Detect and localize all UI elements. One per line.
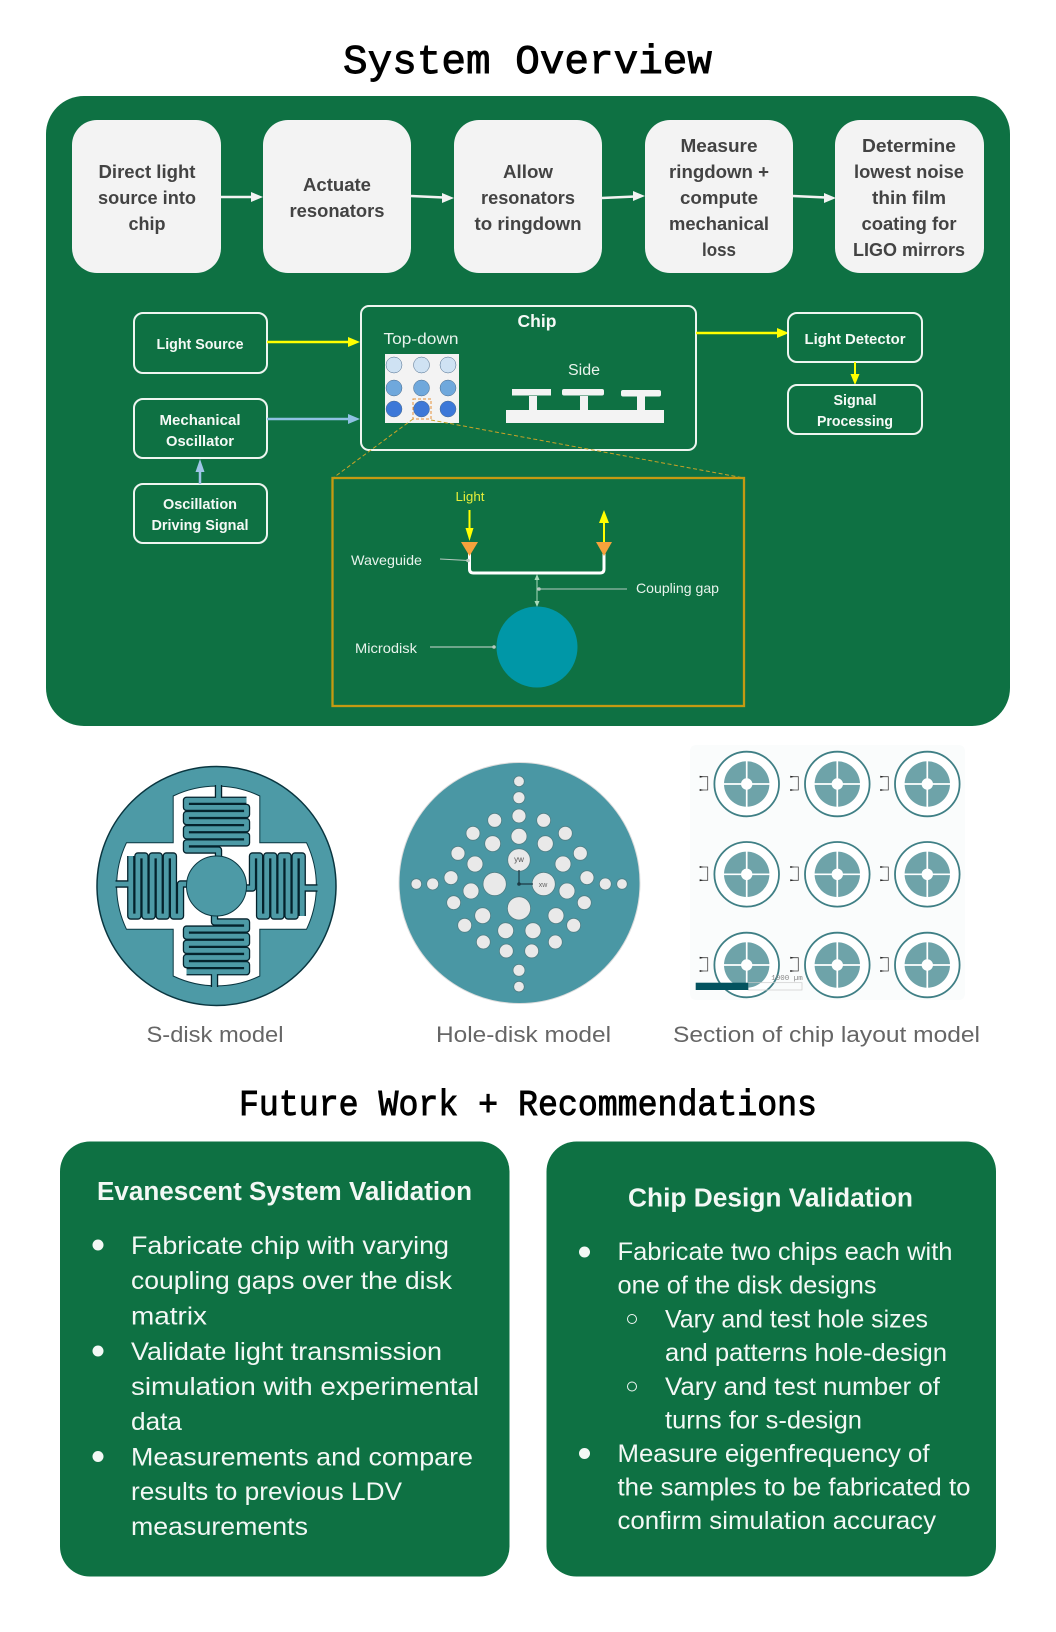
arrow: step 2 to 3 — [411, 193, 454, 203]
step: measure: mechanical — [669, 213, 769, 234]
label: waveguide: Waveguide — [351, 552, 422, 568]
title: System Overview: System Overview — [343, 40, 712, 86]
arrow: step 3 to 4 — [602, 191, 645, 201]
microdisk — [496, 606, 578, 688]
model: chip layout section — [690, 745, 965, 1000]
step: determine — [835, 120, 984, 273]
model: s-disk — [97, 766, 336, 1006]
bullet list: results to previous LDV — [131, 1478, 402, 1506]
bullet list: confirm simulation accuracy — [618, 1507, 936, 1535]
box: chip — [361, 306, 696, 450]
step: actuate: resonators — [290, 200, 384, 221]
bullet list: turns for s-design — [665, 1406, 862, 1434]
step: measure: loss — [702, 239, 736, 260]
step: ringdown: Allow — [503, 161, 553, 182]
bullet list: the samples to be fabricated to — [618, 1474, 970, 1502]
arrow: step 4 to 5 — [793, 193, 836, 203]
panel heading: Evanescent System Validation — [97, 1178, 472, 1206]
step: direct light: Direct light — [98, 161, 196, 182]
arrow: oscillator to chip — [267, 414, 360, 424]
step: actuate — [263, 120, 411, 273]
bullet list: Validate light transmission — [131, 1338, 442, 1366]
box: chip: Chip — [518, 311, 556, 331]
step: ringdown — [454, 120, 602, 273]
model: hole-disk — [399, 762, 640, 1004]
arrow: light out — [599, 510, 609, 542]
arrow: step 1 to 2 — [221, 192, 263, 202]
label: coupling gap — [537, 580, 719, 596]
box: signal processing — [788, 385, 922, 434]
bullet list: one of the disk designs — [618, 1272, 876, 1300]
chip top-down view — [384, 331, 459, 423]
caption: hole-disk: Hole-disk model — [436, 1022, 611, 1047]
arrow: driving signal to oscillator — [196, 459, 204, 484]
step: measure: ringdown + — [669, 161, 769, 182]
box: oscillation driving signal — [134, 484, 267, 543]
bullet list: data — [131, 1408, 183, 1436]
model: hole-disk: yw — [514, 855, 524, 864]
box: light source — [134, 313, 267, 373]
waveguide — [470, 553, 604, 573]
box: light detector — [788, 313, 922, 362]
block diagram — [134, 306, 922, 543]
heading: future work: Future Work + Recommendations — [239, 1085, 817, 1126]
step: determine: thin film — [872, 187, 946, 208]
arrow: chip to detector — [696, 328, 789, 338]
step: direct light: chip — [128, 213, 166, 234]
box: mechanical oscillator — [134, 399, 267, 458]
bullet list: Measurements and compare — [131, 1444, 473, 1472]
step: determine: Determine — [862, 135, 956, 156]
box: oscillation driving signal: Driving Signal — [152, 517, 248, 534]
chip side view: Side — [568, 362, 600, 379]
arrow: coupling gap — [534, 574, 540, 607]
step: actuate: Actuate — [303, 174, 371, 195]
grating couplers — [461, 542, 612, 556]
step: ringdown: to ringdown — [474, 213, 582, 234]
step: measure: compute — [680, 187, 758, 208]
panel: chip design validation — [546, 1142, 996, 1576]
label: light: Light — [456, 489, 485, 504]
panel: evanescent system validation — [60, 1142, 510, 1576]
bullet list: Vary and test hole sizes — [665, 1306, 928, 1334]
label: microdisk — [355, 640, 496, 656]
caption: s-disk: S-disk model — [146, 1022, 284, 1047]
panel: system overview — [46, 96, 1010, 726]
bullet list: coupling gaps over the disk — [131, 1267, 452, 1295]
step: direct light: source into — [98, 187, 196, 208]
scale bar: 1000 µm — [771, 975, 803, 983]
scale bar — [696, 975, 803, 990]
panel heading: Chip Design Validation — [628, 1184, 913, 1212]
label: waveguide — [351, 552, 470, 568]
arrow: detector to signal processing — [850, 362, 860, 385]
bullet list: measurements — [131, 1513, 308, 1541]
arrow: light in — [466, 510, 474, 541]
bullet list: matrix — [131, 1302, 207, 1330]
label: coupling gap: Coupling gap — [636, 580, 719, 596]
label: microdisk: Microdisk — [355, 640, 418, 656]
inset: waveguide and microdisk detail — [332, 478, 744, 706]
bullet list: Measure eigenfrequency of — [618, 1440, 930, 1468]
step: direct light — [72, 120, 221, 273]
zoom callout lines — [333, 419, 744, 478]
bullet list — [92, 1232, 479, 1541]
step: measure: Measure — [680, 135, 758, 156]
box: mechanical oscillator: Mechanical — [160, 412, 240, 429]
bullet list — [579, 1238, 970, 1535]
bullet list: Fabricate two chips each with — [618, 1238, 952, 1266]
step: measure — [645, 120, 793, 273]
arrow: light source to chip — [267, 337, 360, 347]
box: signal processing: Signal — [834, 392, 876, 409]
step: determine: lowest noise — [854, 161, 964, 182]
model: hole-disk: xw — [539, 882, 548, 889]
step: ringdown: resonators — [481, 187, 575, 208]
caption: chip layout: Section of chip layout model — [673, 1022, 980, 1047]
step: determine: coating for — [862, 213, 956, 234]
chip side view — [506, 362, 664, 423]
box: oscillation driving signal: Oscillation — [163, 496, 237, 513]
box: mechanical oscillator: Oscillator — [166, 433, 234, 450]
bullet list: Vary and test number of — [665, 1373, 941, 1401]
box: signal processing: Processing — [817, 413, 893, 430]
process flow — [72, 120, 984, 273]
bullet list: simulation with experimental — [131, 1373, 479, 1401]
box: light detector: Light Detector — [804, 331, 906, 348]
step: determine: LIGO mirrors — [853, 239, 965, 260]
bullet list: and patterns hole-design — [665, 1339, 947, 1367]
chip top-down view: Top-down — [384, 331, 458, 348]
bullet list: Fabricate chip with varying — [131, 1232, 449, 1260]
box: light source: Light Source — [156, 336, 244, 353]
